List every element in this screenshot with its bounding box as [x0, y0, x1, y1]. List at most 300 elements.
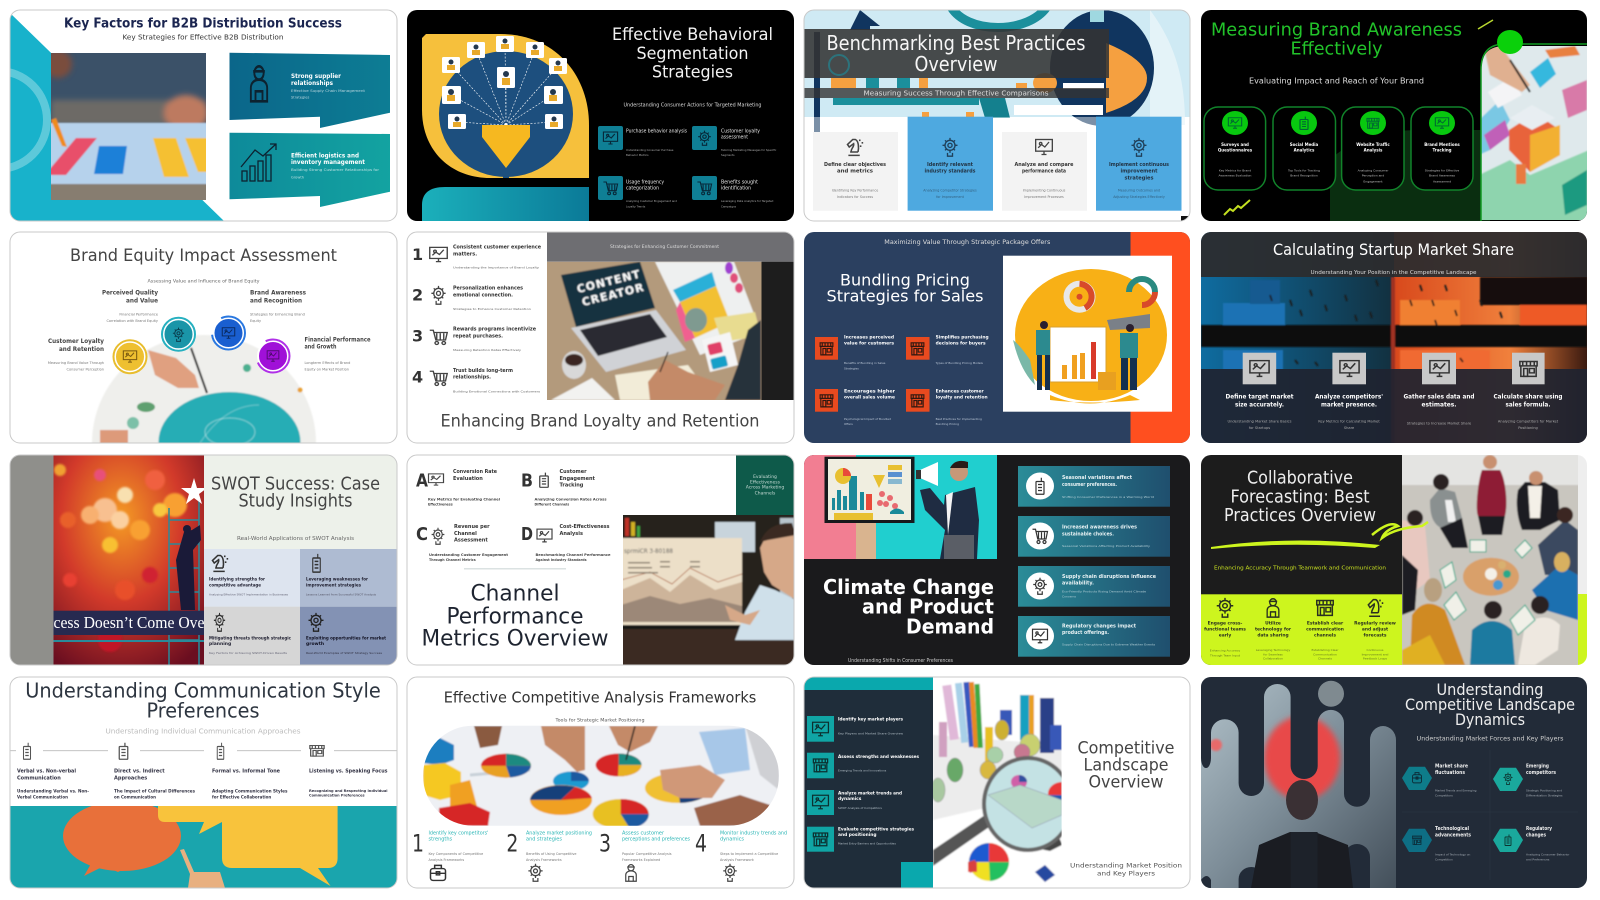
step 4: Monitor industry trends and: [720, 831, 787, 837]
slide card: Measuring Brand Awareness Effectively: [1201, 10, 1589, 222]
step: utilize: Leveraging Technology: [1256, 648, 1290, 652]
item 4: 4: [412, 368, 423, 387]
column: formal: Adapting Communication Styles: [212, 789, 288, 794]
label: customer loyalty: [48, 338, 104, 372]
item: strengths: [807, 753, 919, 778]
pill: mentions: Assessment: [1433, 179, 1452, 183]
step: calculate: Positioning: [1518, 426, 1538, 430]
step: objectives: Identifying Key Performance: [832, 188, 878, 192]
callout banner: logistics and inventory: Efficient logistics and: [291, 152, 359, 159]
item A: Effectiveness: [428, 503, 453, 507]
step: review: and adjust: [1362, 626, 1388, 632]
label: financial performance: Longterm Effects of Brand: [304, 361, 350, 365]
item: competitors: competitors: [1526, 770, 1556, 776]
quadrant: weaknesses: [300, 549, 397, 607]
step: analyze: [1315, 353, 1383, 430]
item: regulatory: [1493, 826, 1570, 862]
panel: supply chain: Eco-Friendly Products Rising Demand Amid Climate: [1062, 590, 1146, 594]
column: direct: [114, 743, 196, 799]
pill: social: [1273, 107, 1336, 190]
pill: website: Analysis: [1364, 147, 1383, 152]
subtitle: Evaluating Impact and Reach of Your Brand: [1249, 76, 1424, 85]
panel: supply chain: Supply chain disruptions influence: [1062, 574, 1157, 580]
label: perceived quality: Financial Performance: [119, 313, 158, 317]
item A: Conversion Rate: [453, 469, 498, 475]
item: market share: Competitors: [1435, 794, 1453, 798]
item: market share: Market Trends and Emerging: [1435, 789, 1477, 793]
green tag: Evaluating: [753, 474, 777, 480]
step 4: Analysis Framework: [720, 858, 754, 862]
step: review: Continuous: [1367, 648, 1384, 652]
item: regulatory: changes: [1526, 833, 1546, 839]
slide card: Channel Performance Metrics Overview: [407, 455, 796, 667]
item D: [521, 524, 611, 562]
item: benefits sought: Leveraging Data Analytics for Targeted: [721, 199, 774, 203]
step 3: [599, 830, 690, 881]
title band: [804, 29, 1109, 78]
step: establish: Communication: [1313, 652, 1337, 656]
item: loyalty: Best Practices for Implementing: [936, 417, 982, 421]
callout banner: supplier relationships: Effective Supply Chain Management: [291, 89, 366, 93]
speech bubble illustration: [10, 801, 397, 888]
column: listening: Communication Preferences: [309, 794, 365, 798]
label: brand awareness: and Recognition: [250, 297, 302, 304]
label: customer loyalty: Customer Loyalty: [48, 338, 104, 345]
subtitle: and Key Players: [1097, 871, 1155, 878]
title: Understanding Communication Style: [25, 679, 381, 703]
item 1: matters.: [453, 252, 477, 258]
step: define: [1226, 353, 1294, 430]
photo: man with megaphone: [804, 455, 997, 559]
step: establish: Establish clear: [1307, 621, 1344, 627]
subtitle: Tools for Strategic Market Positioning: [554, 717, 645, 722]
label: perceived quality: Correlation with Brand Equity: [106, 319, 158, 323]
item A: A: [416, 471, 428, 492]
step 1: Identify key competitors': [428, 831, 488, 837]
step 3: 3: [599, 830, 611, 858]
photo: pie charts and hands: [421, 723, 781, 829]
slide card: Key Factors for B2B Distribution Success: [0, 10, 397, 221]
step: standards: for Improvement: [936, 195, 965, 199]
item: perceived value: value for customers: [844, 340, 894, 346]
item: simplifies: Simplifies purchasing: [936, 334, 989, 340]
item: strengths: Emerging Trends and Innovations: [838, 768, 887, 772]
slide card: Competitive Landscape Overview: [804, 675, 1190, 890]
item: loyalty: Enhances customer: [936, 388, 984, 394]
item: perceived value: [815, 334, 894, 370]
photo: bokeh ladder: cess Doesn’t Come Ove: [54, 613, 204, 632]
step: establish: communication: [1306, 626, 1344, 632]
item: technology: Impact of Technology on: [1435, 853, 1470, 857]
item: usage frequency: Usage frequency: [626, 180, 664, 186]
subtitle: [1070, 862, 1182, 878]
title: Segmentation: [636, 44, 748, 64]
item: regulatory: and Preferences: [1526, 858, 1550, 862]
item: regulatory: Regulatory: [1526, 826, 1553, 832]
step 4: 4: [695, 830, 707, 858]
quadrant: weaknesses: Lessons Learned from Successful SWOT Analysis: [306, 593, 377, 597]
quadrant: strengths: Identifying strengths for: [209, 577, 266, 583]
label: customer loyalty: Measuring Brand Value Through: [48, 361, 104, 365]
column: listening: Recognizing and Respecting Individual: [309, 789, 388, 793]
subtitle: Understanding Individual Communication Approaches: [106, 728, 301, 736]
step 1: Key Components of Competitive: [428, 852, 483, 856]
item: customer loyalty: Customer loyalty: [721, 129, 760, 135]
column: verbal: Verbal Communication: [17, 794, 68, 799]
pill: mentions: Brand Awareness: [1429, 174, 1455, 178]
column: verbal: Verbal vs. Non-verbal: [17, 769, 76, 775]
step: utilize: [1255, 599, 1292, 660]
item C: Assessment: [454, 538, 488, 544]
item 3: Measuring Retention Rates Effectively: [453, 348, 521, 352]
title: SWOT Success: Case: [211, 474, 380, 494]
subtitle: Understanding Consumer Actions for Targeted Marketing: [624, 103, 762, 109]
step: calculate: [1494, 353, 1562, 430]
label: perceived quality: and Value: [126, 297, 158, 304]
item: trends: Analyze market trends and: [838, 791, 902, 797]
item: perceived value: Strategies: [844, 366, 859, 370]
title: Key Factors for B2B Distribution Success: [64, 17, 342, 32]
step 3: perceptions and preferences: [622, 836, 690, 842]
subtitle: Measuring Success Through Effective Comparisons: [864, 90, 1049, 98]
title: Dynamics: [1455, 710, 1525, 729]
item 4: [412, 368, 541, 393]
title: Practices Overview: [1224, 505, 1376, 526]
step: establish: Channels: [1318, 656, 1332, 660]
quadrant: threats: [204, 607, 300, 665]
item B: Engagement: [560, 476, 596, 482]
step: improvement: Implement continuous: [1109, 162, 1169, 168]
step: analyze: Implementing Continuous: [1023, 188, 1066, 192]
title: [1078, 738, 1174, 792]
item: trends: dynamics: [838, 796, 862, 802]
item: technology: Competition: [1435, 858, 1453, 862]
item A: [416, 469, 500, 507]
pill: mentions: Tracking: [1432, 147, 1452, 152]
item 2: Personalization enhances: [453, 286, 523, 292]
item 4: relationships.: [453, 375, 491, 381]
step: improvement: Measuring Outcomes and: [1118, 188, 1160, 192]
item: purchase behavior: Purchase behavior analysis: [626, 129, 687, 135]
step: improvement: improvement: [1120, 169, 1158, 175]
icon circle: financial performance: [256, 340, 290, 372]
photo: content creator laptop: [545, 260, 764, 402]
item A: Key Metrics for Evaluating Channel: [428, 498, 500, 502]
panel: awareness: [1018, 516, 1170, 557]
item: usage frequency: Analyzing Customer Engagement and: [626, 199, 677, 203]
item 2: [412, 285, 531, 311]
left panel: [804, 677, 933, 888]
item: purchase behavior: [598, 126, 687, 157]
slide card: Brand Equity Impact Assessment: [10, 232, 398, 444]
step: improvement: Adjusting Strategies Effectively: [1113, 195, 1165, 199]
title: Bundling Pricing: [840, 271, 970, 290]
item: usage frequency: [598, 176, 677, 208]
item: strategies: and positioning: [838, 832, 877, 838]
pill: surveys: Questionnaires: [1218, 147, 1253, 152]
photo: team circle: [1400, 453, 1580, 667]
item: technology: [1402, 826, 1471, 862]
subtitle band: [804, 88, 1109, 98]
item: usage frequency: Loyalty Trends: [626, 204, 646, 208]
title: Enhancing Brand Loyalty and Retention: [440, 412, 760, 432]
item: sales volume: [815, 388, 896, 426]
item 1: Consistent customer experience: [453, 245, 542, 251]
illustration: marketing team: [1003, 256, 1172, 412]
step: gather: Gather sales data and: [1404, 393, 1474, 400]
label: brand awareness: [250, 289, 306, 323]
item: strategies: Market Entry Barriers and Opportunities: [838, 842, 896, 846]
step 1: strengths: [428, 836, 453, 842]
item 1: Understanding the Importance of Brand Loyalty: [453, 266, 539, 270]
step: utilize: Utilize: [1265, 621, 1281, 627]
item: customer loyalty: Segments: [721, 153, 735, 157]
step: establish: channels: [1314, 632, 1336, 638]
title: [1211, 20, 1462, 59]
item 3: [412, 327, 537, 352]
quadrant: opportunities: Real-World Examples of SWOT Strategy Success: [306, 651, 383, 655]
step: calculate: sales formula.: [1506, 401, 1550, 408]
step: standards: [908, 117, 993, 211]
title: Effective Competitive Analysis Frameworks: [444, 688, 756, 706]
pill: website: Engagement: [1363, 179, 1383, 183]
step 2: and strategies: [526, 836, 562, 842]
icon circle: customer loyalty: [114, 340, 146, 373]
quadrant: strengths: [204, 549, 300, 607]
item 2: Strategies to Enhance Customer Retention: [453, 307, 531, 311]
pill: website: [1342, 107, 1404, 190]
subtitle: Real-World Applications of SWOT Analysis: [237, 536, 354, 542]
label: financial performance: and Growth: [304, 343, 336, 350]
title: [1224, 467, 1376, 526]
step: utilize: for Seamless: [1263, 652, 1283, 656]
item: sales volume: Encourages higher: [844, 388, 896, 394]
step: calculate: Analyzing Competitors for Market: [1498, 419, 1559, 423]
panel: regulatory: Supply Chain Disruptions Due to Extreme Weather Events: [1062, 642, 1155, 646]
title: Demand: [906, 614, 994, 638]
step: analyze: performance data: [1022, 169, 1066, 175]
item: simplifies: decisions for buyers: [936, 340, 986, 346]
label: customer loyalty: Consumer Perception: [67, 368, 104, 372]
item: loyalty: loyalty and retention: [936, 394, 988, 400]
item C: Channel: [454, 531, 477, 537]
item B: Tracking: [560, 483, 584, 489]
label: financial performance: [304, 337, 370, 372]
step: define: for Startups: [1249, 426, 1270, 430]
slide card: Climate Change and Product Demand: [804, 455, 1190, 665]
label: customer loyalty: and Retention: [59, 346, 104, 353]
teal bottom shape: [422, 187, 589, 221]
step 1: Analysis Frameworks: [428, 858, 464, 862]
item: purchase behavior: Understanding Consumer Purchase: [626, 148, 674, 152]
item: benefits sought: Campaigns: [721, 204, 737, 208]
title: [25, 679, 381, 723]
item 2: 2: [412, 285, 423, 304]
step: improvement: strategies: [1124, 176, 1154, 182]
item: competitors: Emerging: [1526, 764, 1549, 770]
item D: Cost-Effectiveness: [560, 524, 610, 530]
blurred chart photo: [44, 50, 208, 202]
step 2: Analysis Frameworks: [526, 858, 562, 862]
step 4: dynamics: [720, 836, 744, 842]
panel: seasonal: Seasonal variations affect: [1062, 475, 1133, 481]
quadrant: threats: Mitigating threats through strategic: [209, 635, 291, 641]
panel: regulatory: product offerings.: [1062, 630, 1109, 636]
step: gather: estimates.: [1422, 401, 1456, 408]
callout banner: logistics and inventory: [230, 133, 390, 207]
step: engage: Engage cross-: [1208, 621, 1243, 627]
item: market share: [1402, 764, 1477, 798]
pill: social: Top Tools for Tracking: [1287, 168, 1320, 172]
column: direct: on Communication: [114, 794, 156, 799]
quadrant: opportunities: Exploiting opportunities for market: [306, 635, 387, 641]
column: formal: [212, 743, 288, 799]
subtitle: Enhancing Accuracy Through Teamwork and Communication: [1214, 565, 1386, 571]
step 4: Steps to Implement a Competitive: [720, 852, 778, 856]
title: [823, 575, 994, 638]
callout banner: supplier relationships: Strategies: [291, 96, 309, 100]
panel: supply chain: availability.: [1062, 581, 1094, 587]
step 3: Assess customer: [622, 831, 665, 837]
item B: Analyzing Conversion Rates Across: [534, 498, 607, 502]
step: objectives: Indicators for Success: [837, 195, 873, 199]
step: review: Improvement and: [1362, 652, 1388, 656]
icon: growth chart: [241, 144, 276, 181]
item: strengths: Assess strengths and weaknesses: [838, 754, 919, 760]
slide card: Bundling Pricing Strategies for Sales: [804, 232, 1190, 443]
panel: seasonal: consumer preferences.: [1062, 482, 1117, 488]
quadrant: weaknesses: Leveraging weaknesses for: [306, 577, 369, 583]
title: Preferences: [146, 699, 260, 723]
item: trends: [807, 790, 902, 815]
panel: supply chain: Concerns: [1062, 595, 1076, 599]
top banner: Strategies for Enhancing Customer Commitment: [610, 244, 719, 250]
step 2: Benefits of Using Competitive: [526, 852, 576, 856]
step: standards: Identify relevant: [927, 162, 974, 168]
subtitle: Understanding Shifts in Consumer Preferences: [848, 658, 953, 664]
title: Competitive: [1078, 738, 1174, 758]
title: [612, 25, 773, 83]
subtitle: Understanding Market Forces and Key Players: [1416, 736, 1564, 743]
step: objectives: [813, 132, 898, 211]
title: Performance: [446, 604, 584, 629]
item C: C: [416, 524, 428, 545]
label: perceived quality: [102, 289, 158, 323]
step 3: Frameworks Explained: [622, 858, 660, 862]
icon: worker: [251, 66, 267, 101]
step: analyze: Improvement Processes: [1024, 195, 1064, 199]
item 3: 3: [412, 327, 423, 346]
pill: website: Analyzing Consumer: [1358, 168, 1389, 172]
item 4: Trust builds long-term: [453, 368, 513, 374]
slide card: Calculating Startup Market Share: [1201, 232, 1587, 443]
photo: analyst with laptop: [621, 513, 796, 667]
step: engage: Through Team Input: [1209, 653, 1241, 657]
step 2: [506, 830, 592, 881]
pill: surveys: [1204, 107, 1266, 190]
subtitle: Key Strategies for Effective B2B Distribution: [122, 34, 284, 42]
step: engage: Enhancing Accuracy: [1210, 648, 1240, 652]
item: sales volume: overall sales volume: [844, 394, 895, 400]
panel: awareness: Seasonal Variations Affecting Product Availability: [1062, 544, 1150, 548]
panel: supply chain: [1018, 566, 1170, 607]
subtitle: Understanding Market Position: [1070, 862, 1182, 869]
item C: Understanding Customer Engagement: [429, 553, 508, 557]
column: verbal: Understanding Verbal vs. Non-: [17, 789, 89, 794]
item B: Different Channels: [534, 503, 569, 507]
step: establish: Establishing Clear: [1312, 648, 1339, 652]
callout banner: logistics and inventory: inventory management: [291, 159, 365, 166]
slide card: Enhancing Brand Loyalty and Retention: [407, 232, 794, 443]
callout banner: supplier relationships: Strong supplier: [291, 73, 341, 80]
step: review: Feedback Loops: [1363, 656, 1387, 660]
illustration: hand drawing on dial: [92, 335, 316, 442]
item: key players: [807, 716, 904, 742]
icon circle: perceived quality: [162, 318, 195, 351]
title: Calculating Startup Market Share: [1273, 240, 1514, 259]
title: [211, 474, 380, 512]
slide card: Effective Competitive Analysis Frameworks: [407, 677, 794, 888]
subtitle: Assessing Value and Influence of Brand Equity: [148, 278, 260, 284]
step 1: [412, 830, 488, 880]
column: direct: Approaches: [114, 776, 147, 782]
item: competitors: Differentiation Strategies: [1526, 794, 1563, 798]
column: verbal: [17, 743, 89, 799]
quadrant: threats: Key Factors for Achieving SWOT-Driven Results: [209, 651, 288, 655]
step: analyze: market presence.: [1321, 401, 1377, 408]
step: gather: Strategies to Increase Market Share: [1407, 421, 1472, 425]
item: customer loyalty: assessment: [721, 134, 748, 140]
label: financial performance: Financial Performance: [304, 337, 370, 344]
item C: [416, 524, 508, 562]
pill: mentions: Brand Mentions: [1424, 142, 1460, 147]
item D: D: [521, 524, 533, 545]
step: analyze: Key Metrics for Calculating Market: [1318, 419, 1380, 423]
title: Brand Equity Impact Assessment: [70, 246, 337, 266]
item: competitors: [1493, 764, 1563, 798]
pill: mentions: [1411, 107, 1473, 190]
slide card: Understanding Communication Style Preferences: [10, 677, 397, 888]
item: customer loyalty: [692, 126, 777, 157]
step: review: Regularly review: [1354, 621, 1396, 627]
step: objectives: Define clear objectives: [824, 162, 886, 168]
item: technology: advancements: [1435, 833, 1471, 839]
column: listening: [309, 746, 388, 798]
title: [422, 582, 608, 652]
item: sales volume: Psychological Impact of Bundled: [844, 417, 891, 421]
item: usage frequency: categorization: [626, 186, 659, 192]
column: verbal: Communication: [17, 776, 61, 782]
panel: awareness: sustainable choices.: [1062, 531, 1114, 537]
title: Benchmarking Best Practices: [826, 31, 1086, 55]
item 2: emotional connection.: [453, 293, 513, 299]
photo: analyst with laptop: sprmiCR 3-80188: [624, 548, 673, 555]
photo: content creator laptop: CONTENT: [576, 267, 642, 296]
photo: bokeh ladder: [54, 455, 207, 665]
item: benefits sought: Benefits sought: [721, 180, 758, 186]
step: engage: [1204, 598, 1246, 657]
item: market share: fluctuations: [1435, 770, 1465, 776]
photo: blue and orange pegs: [1201, 232, 1587, 443]
item: simplifies: [906, 334, 989, 365]
quadrant: weaknesses: improvement strategies: [306, 582, 361, 588]
item: perceived value: Benefits of Bundling in Sales: [844, 361, 886, 365]
step 3: Popular Competitive Analysis: [622, 852, 672, 856]
title: Overview: [914, 52, 998, 76]
item 3: repeat purchases.: [453, 333, 503, 339]
pill: website: Website Traffic: [1356, 142, 1390, 147]
item: trends: SWOT Analysis of Competitors: [838, 806, 882, 810]
